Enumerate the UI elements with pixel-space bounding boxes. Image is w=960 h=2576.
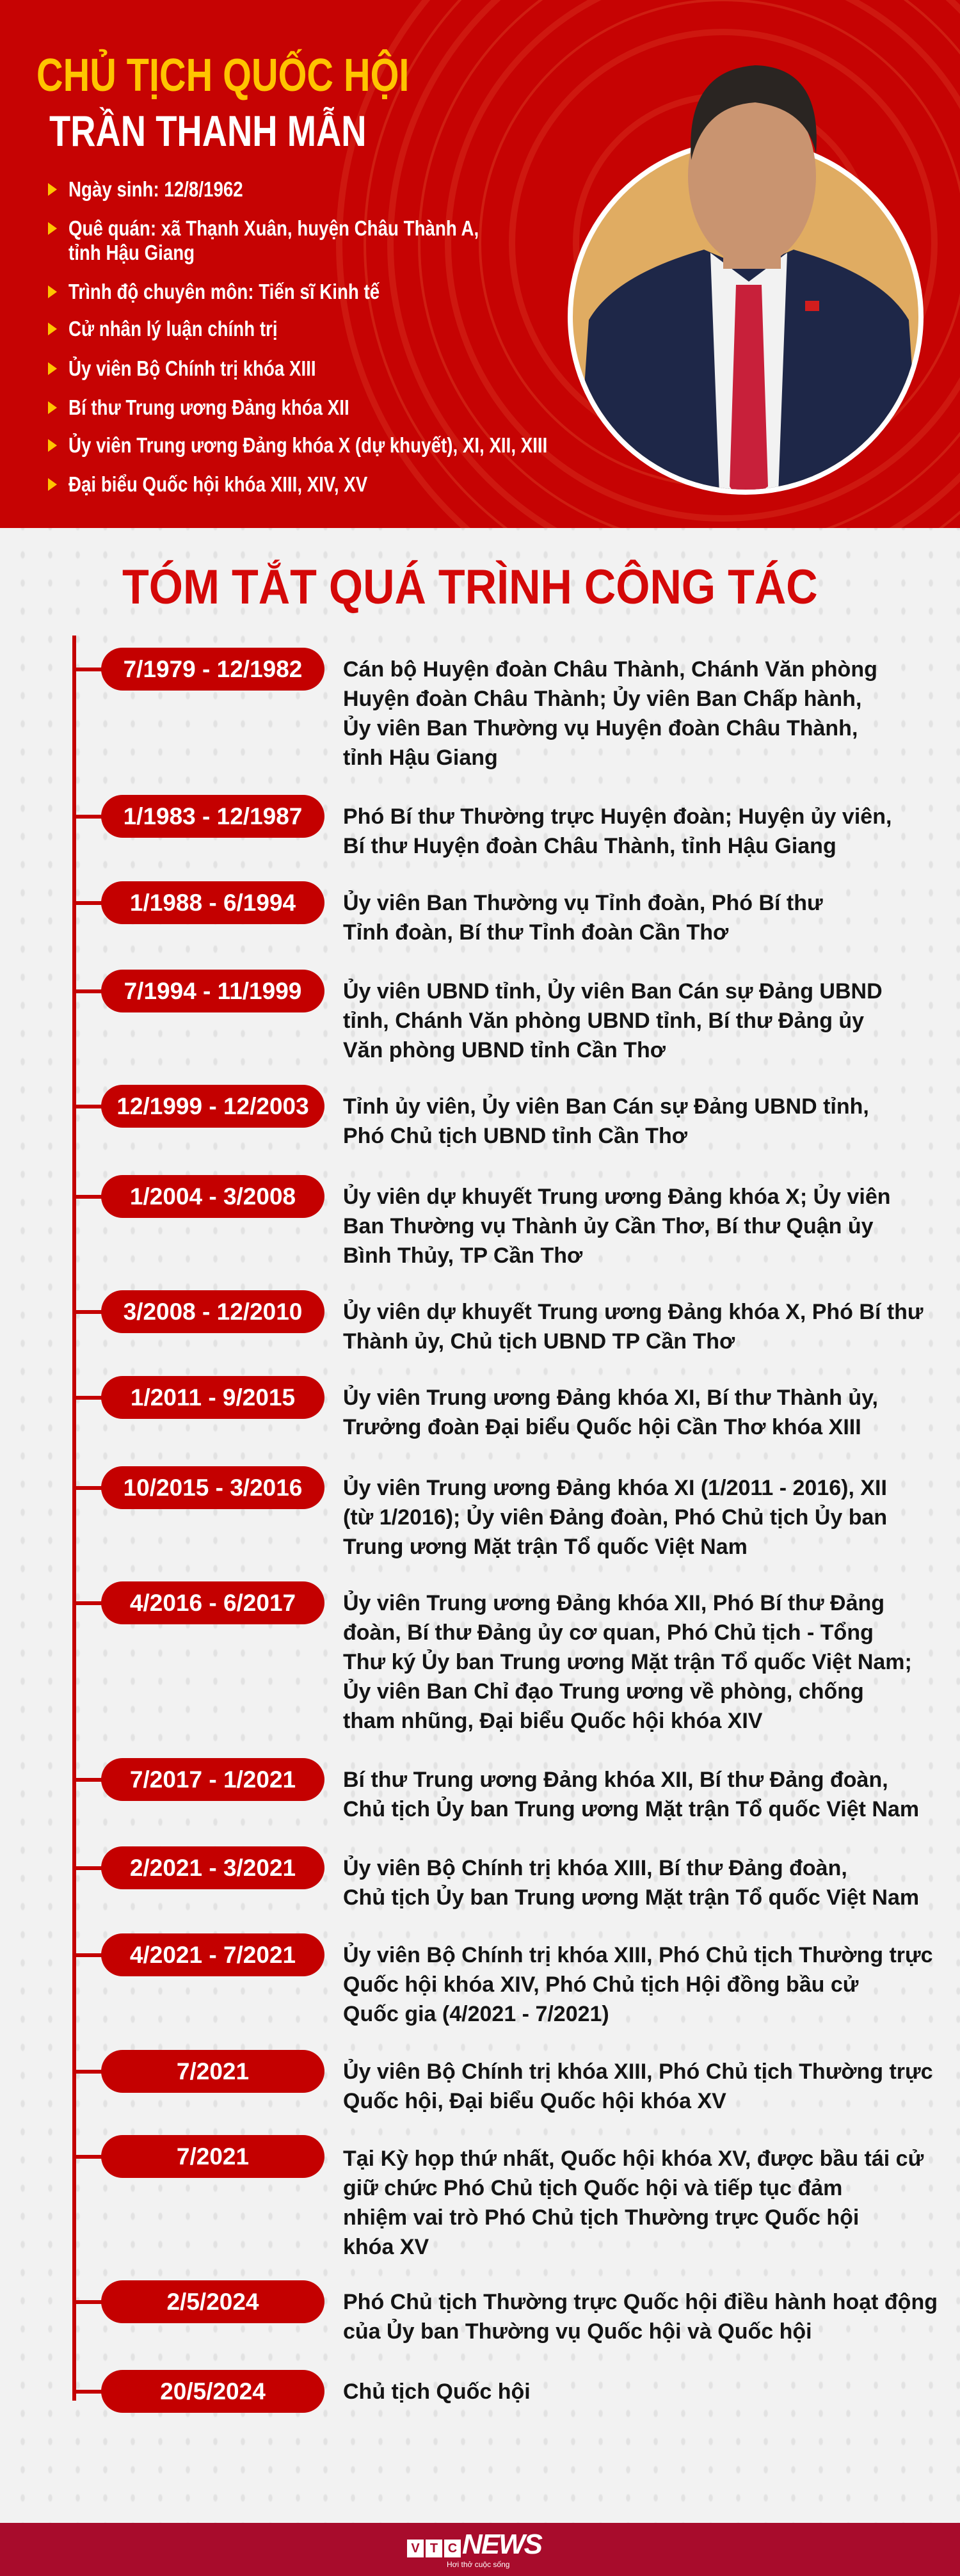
entry 7: Ủy viên dự khuyết Trung ương Đảng khóa X, Phó Bí thư bbox=[343, 1300, 924, 1324]
entry 6: Bình Thủy, TP Cần Thơ bbox=[343, 1244, 582, 1268]
entry 9: (từ 1/2016); Ủy viên Đảng đoàn, Phó Chủ tịch Ủy ban bbox=[343, 1505, 887, 1530]
bullet list: personal info: Quê quán: xã Thạnh Xuân, huyện Châu Thành A, bbox=[68, 216, 479, 240]
entry 2: Bí thư Huyện đoàn Châu Thành, tỉnh Hậu Giang bbox=[343, 834, 836, 858]
entry 13: Quốc hội khóa XIV, Phó Chủ tịch Hội đồng bầu cử bbox=[343, 1972, 858, 1997]
entry 14: Ủy viên Bộ Chính trị khóa XIII, Phó Chủ tịch Thường trực bbox=[343, 2060, 933, 2084]
entry 4: 7/1994 - 11/1999 bbox=[124, 978, 301, 1004]
bullet: birth bbox=[48, 177, 243, 201]
bullet: politburo bbox=[48, 356, 316, 380]
bullet: secretariat bbox=[48, 396, 349, 419]
entry 5: Phó Chủ tịch UBND tỉnh Cần Thơ bbox=[343, 1124, 687, 1148]
entry 10: đoàn, Bí thư Đảng ủy cơ quan, Phó Chủ tịch - Tổng bbox=[343, 1620, 874, 1645]
entry 2: 1/1983 - 12/1987 bbox=[124, 803, 302, 829]
entry 16: của Ủy ban Thường vụ Quốc hội và Quốc hội bbox=[343, 2319, 812, 2344]
entry 1: 7/1979 - 12/1982 bbox=[124, 656, 302, 682]
logo: VTC NEWS: T bbox=[430, 2541, 438, 2556]
entry 14 bbox=[76, 2050, 933, 2113]
entry 9: Trung ương Mặt trận Tổ quốc Việt Nam bbox=[343, 1535, 748, 1559]
entry 4: Văn phòng UBND tỉnh Cần Thơ bbox=[343, 1038, 666, 1062]
entry 6: 1/2004 - 3/2008 bbox=[130, 1183, 296, 1210]
entry 1: Huyện đoàn Châu Thành; Ủy viên Ban Chấp hành, bbox=[343, 687, 861, 711]
bullet list: personal info: Ngày sinh: 12/8/1962 bbox=[68, 177, 243, 201]
entry 12: 2/2021 - 3/2021 bbox=[130, 1855, 296, 1881]
entry 10: Ủy viên Ban Chỉ đạo Trung ương về phòng, chống bbox=[343, 1679, 864, 1704]
entry 9: 10/2015 - 3/2016 bbox=[124, 1475, 302, 1501]
entry 6: Ban Thường vụ Thành ủy Cần Thơ, Bí thư Quận ủy bbox=[343, 1214, 874, 1238]
decorative drum pattern bbox=[336, 0, 960, 528]
bullet list: personal info: Cử nhân lý luận chính trị bbox=[68, 317, 278, 340]
bullet list: personal info: Ủy viên Trung ương Đảng khóa X (dự khuyết), XI, XII, XIII bbox=[68, 433, 547, 457]
logo: VTC NEWS: NEWS bbox=[462, 2529, 541, 2560]
bullet: deputy bbox=[48, 472, 367, 496]
entry 11: Bí thư Trung ương Đảng khóa XII, Bí thư Đảng đoàn, bbox=[343, 1768, 888, 1792]
entry 2: Phó Bí thư Thường trực Huyện đoàn; Huyện ủy viên, bbox=[343, 804, 892, 829]
entry 8: Ủy viên Trung ương Đảng khóa XI, Bí thư Thành ủy, bbox=[343, 1386, 878, 1410]
entry 6: Ủy viên dự khuyết Trung ương Đảng khóa X; Ủy viên bbox=[343, 1185, 891, 1209]
entry 15: Tại Kỳ họp thứ nhất, Quốc hội khóa XV, được bầu tái cử bbox=[343, 2147, 924, 2171]
logo: VTC NEWS bbox=[407, 2529, 543, 2569]
title: chu tich quoc hoi: CHỦ TỊCH QUỐC HỘI bbox=[36, 50, 409, 101]
bullet list: personal info: Bí thư Trung ương Đảng khóa XII bbox=[68, 396, 349, 419]
entry 5 bbox=[76, 1085, 869, 1148]
bullet list: personal info bbox=[48, 177, 547, 496]
timeline entries bbox=[76, 648, 938, 2413]
entry 11 bbox=[76, 1758, 919, 1821]
bullet: central committee bbox=[48, 433, 547, 457]
entry 16: Phó Chủ tịch Thường trực Quốc hội điều hành hoạt động bbox=[343, 2290, 938, 2314]
entry 6 bbox=[76, 1175, 891, 1268]
entry 1: Cán bộ Huyện đoàn Châu Thành, Chánh Văn phòng bbox=[343, 657, 877, 682]
bullet list: personal info: tỉnh Hậu Giang bbox=[68, 241, 195, 264]
logo: VTC NEWS: C bbox=[448, 2541, 457, 2556]
entry 3: 1/1988 - 6/1994 bbox=[130, 890, 296, 916]
portrait in circle bbox=[568, 65, 924, 495]
entry 13 bbox=[76, 1933, 933, 2026]
entry 7: Thành ủy, Chủ tịch UBND TP Cần Thơ bbox=[343, 1329, 735, 1354]
entry 5: 12/1999 - 12/2003 bbox=[116, 1093, 309, 1119]
entry 8: 1/2011 - 9/2015 bbox=[131, 1384, 295, 1411]
entry 15: nhiệm vai trò Phó Chủ tịch Thường trực Quốc hội bbox=[343, 2205, 859, 2230]
entry 17 bbox=[76, 2370, 531, 2413]
entry 15: khóa XV bbox=[343, 2235, 429, 2259]
entry 2 bbox=[76, 795, 892, 858]
entry 8: Trưởng đoàn Đại biểu Quốc hội Cần Thơ khóa XIII bbox=[343, 1415, 861, 1439]
entry 15 bbox=[76, 2135, 924, 2259]
entry 3: Tỉnh đoàn, Bí thư Tỉnh đoàn Cần Thơ bbox=[343, 920, 728, 945]
entry 9: Ủy viên Trung ương Đảng khóa XI (1/2011 - 2016), XII bbox=[343, 1476, 887, 1500]
entry 16: 2/5/2024 bbox=[166, 2289, 259, 2315]
logo: VTC NEWS: V bbox=[411, 2541, 420, 2556]
entry 4: tỉnh, Chánh Văn phòng UBND tỉnh, Bí thư Đảng ủy bbox=[343, 1009, 864, 1033]
entry 9 bbox=[76, 1466, 887, 1559]
entry 15: 7/2021 bbox=[177, 2143, 249, 2170]
entry 14: 7/2021 bbox=[177, 2058, 249, 2084]
entry 13: Ủy viên Bộ Chính trị khóa XIII, Phó Chủ tịch Thường trực bbox=[343, 1943, 933, 1967]
entry 13: 4/2021 - 7/2021 bbox=[130, 1942, 296, 1968]
bullet list: personal info: Trình độ chuyên môn: Tiến sĩ Kinh tế bbox=[68, 280, 380, 303]
footer bbox=[0, 2523, 960, 2576]
entry 16 bbox=[76, 2280, 938, 2344]
entry 11: 7/2017 - 1/2021 bbox=[130, 1766, 296, 1793]
entry 8 bbox=[76, 1376, 878, 1439]
section heading: TÓM TẮT QUÁ TRÌNH CÔNG TÁC bbox=[122, 560, 818, 614]
entry 5: Tỉnh ủy viên, Ủy viên Ban Cán sự Đảng UBND tỉnh, bbox=[343, 1094, 869, 1119]
logo: VTC NEWS: Hơi thở cuộc sống bbox=[447, 2560, 509, 2569]
entry 4 bbox=[76, 970, 883, 1062]
entry 12: Chủ tịch Ủy ban Trung ương Mặt trận Tổ quốc Việt Nam bbox=[343, 1885, 919, 1910]
entry 10: Ủy viên Trung ương Đảng khóa XII, Phó Bí thư Đảng bbox=[343, 1591, 884, 1615]
bullet: political theory bbox=[48, 317, 278, 340]
bullet list: personal info: Ủy viên Bộ Chính trị khóa XIII bbox=[68, 356, 316, 380]
timeline vertical line bbox=[72, 636, 76, 2401]
entry 10 bbox=[76, 1581, 912, 1733]
entry 12: Ủy viên Bộ Chính trị khóa XIII, Bí thư Đảng đoàn, bbox=[343, 1856, 847, 1880]
entry 10: Thư ký Ủy ban Trung ương Mặt trận Tổ quốc Việt Nam; bbox=[343, 1650, 912, 1674]
title: name: TRẦN THANH MẪN bbox=[49, 107, 367, 156]
entry 1 bbox=[76, 648, 877, 770]
bullet: degree bbox=[48, 280, 380, 303]
entry 7: 3/2008 - 12/2010 bbox=[124, 1299, 302, 1325]
entry 1: tỉnh Hậu Giang bbox=[343, 746, 498, 770]
entry 17: Chủ tịch Quốc hội bbox=[343, 2380, 531, 2404]
entry 3 bbox=[76, 881, 823, 945]
entry 11: Chủ tịch Ủy ban Trung ương Mặt trận Tổ quốc Việt Nam bbox=[343, 1797, 919, 1821]
timeline section background bbox=[0, 528, 960, 2523]
entry 10: 4/2016 - 6/2017 bbox=[130, 1590, 296, 1616]
bullet: hometown bbox=[48, 216, 479, 264]
entry 15: giữ chức Phó Chủ tịch Quốc hội và tiếp tục đảm bbox=[343, 2176, 842, 2200]
entry 1: Ủy viên Ban Thường vụ Huyện đoàn Châu Thành, bbox=[343, 716, 858, 740]
entry 14: Quốc hội, Đại biểu Quốc hội khóa XV bbox=[343, 2089, 726, 2113]
entry 10: tham nhũng, Đại biểu Quốc hội khóa XIV bbox=[343, 1709, 762, 1733]
entry 4: Ủy viên UBND tỉnh, Ủy viên Ban Cán sự Đảng UBND bbox=[343, 979, 883, 1004]
entry 17: 20/5/2024 bbox=[160, 2378, 266, 2404]
entry 12 bbox=[76, 1846, 919, 1910]
entry 3: Ủy viên Ban Thường vụ Tỉnh đoàn, Phó Bí thư bbox=[343, 891, 823, 915]
entry 13: Quốc gia (4/2021 - 7/2021) bbox=[343, 2002, 609, 2026]
entry 7 bbox=[76, 1290, 924, 1354]
bullet list: personal info: Đại biểu Quốc hội khóa XIII, XIV, XV bbox=[68, 472, 367, 496]
header panel bbox=[0, 0, 960, 528]
